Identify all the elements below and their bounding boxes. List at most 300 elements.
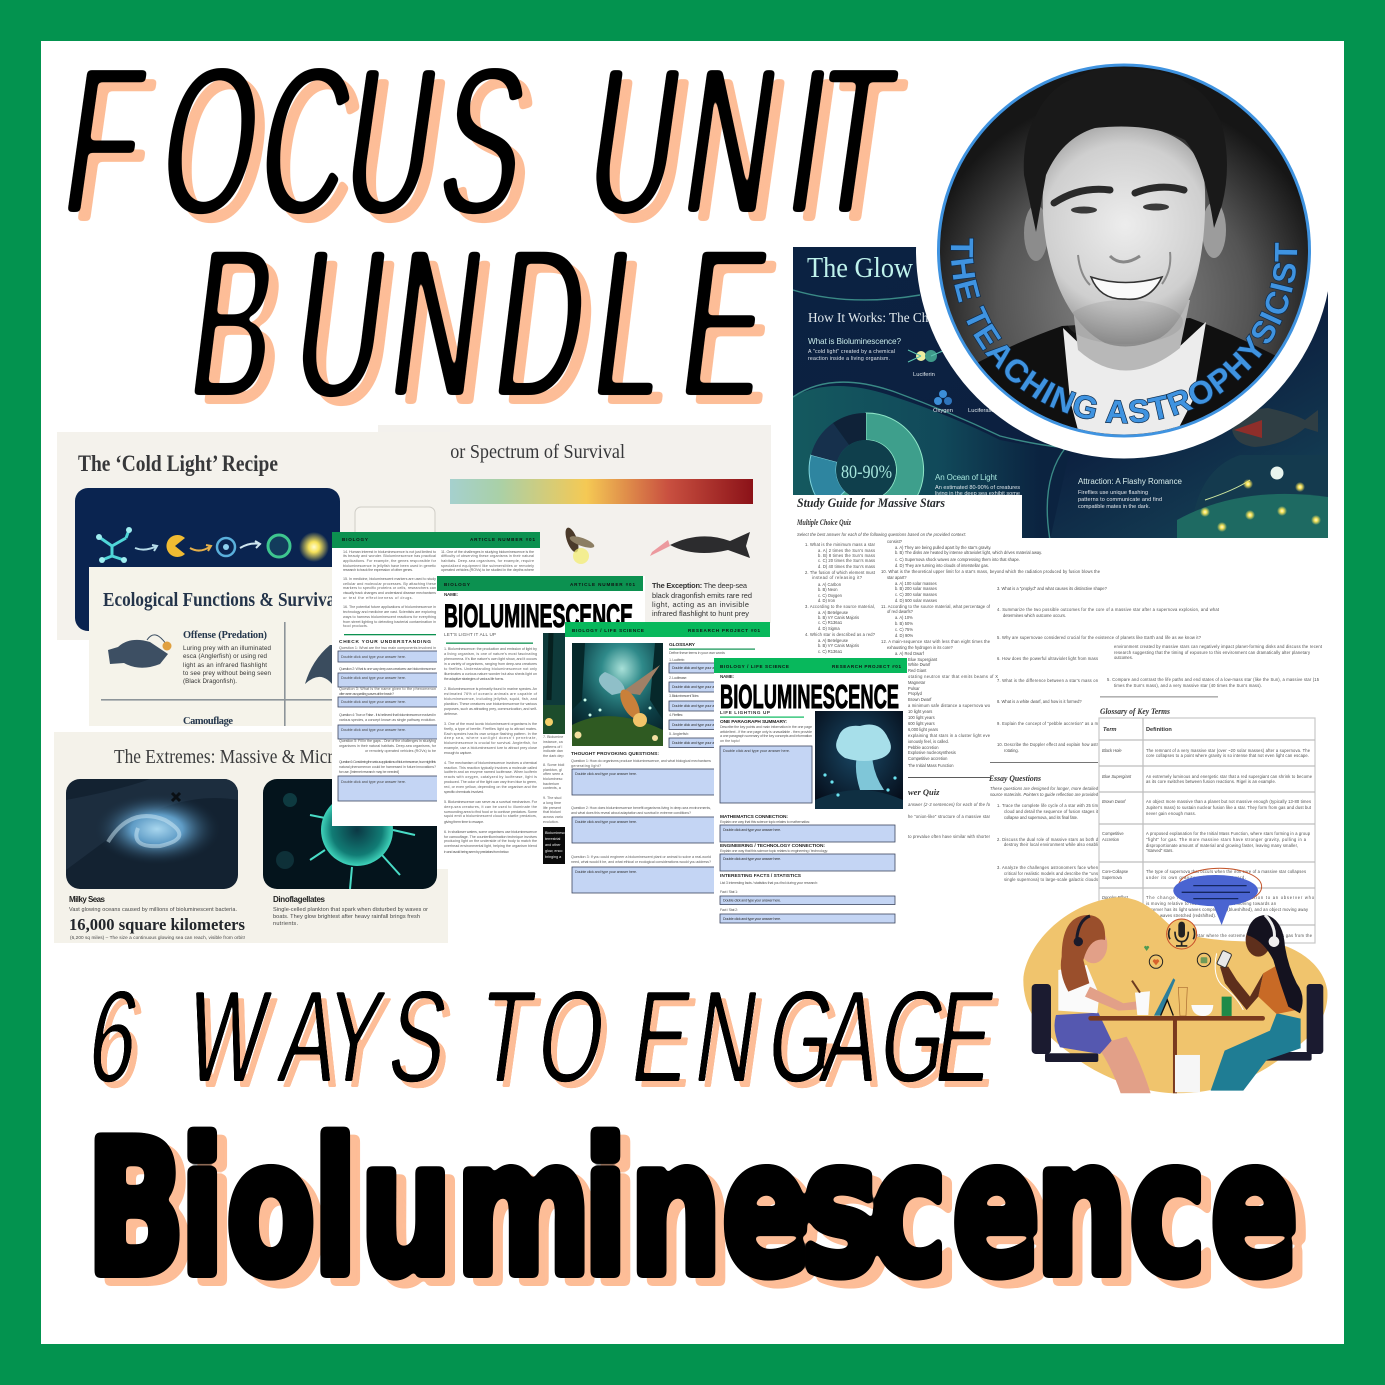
image: glowing firefly in forest — [572, 643, 663, 746]
document: bioluminescence article: contexts, a — [543, 786, 562, 790]
table: glossary: An object more massive than a planet but not massive enough (typically 13-80 times — [1146, 799, 1311, 804]
document: research project first page: a one paragraph summary of the key concepts and information — [720, 734, 812, 738]
document: study guide for massive stars: a. A) Carbon — [818, 582, 842, 587]
document: research project page: Double click and type your answer here. — [672, 723, 732, 727]
document: study guide for massive stars: 10 light years — [908, 709, 932, 714]
document: bioluminescence article: 4. The mechanism of bioluminescence involves a chemical — [444, 761, 537, 765]
panel: the glow infographic: Fireflies use unique flashing — [1078, 490, 1148, 496]
document: research project page — [565, 622, 770, 896]
document: article page two: 11. One of the challenges in studying bioluminescence is the — [441, 550, 534, 554]
document: bioluminescence article: in and avoid being seen by predators from below. — [444, 850, 509, 854]
document: bioluminescence article: 7. Biolumine — [543, 735, 563, 739]
table: glossary: A proposed explanation for the Initial Mass Function, where stars forming in a group — [1146, 831, 1311, 836]
document: bioluminescence article: indicate dan — [543, 749, 563, 753]
document: research project page: RESEARCH PROJECT #01 — [688, 628, 760, 633]
document: research project page: Question 3: If you could engineer a bioluminescent plant or animal to solve a real-world — [571, 855, 711, 859]
document: research project first page: Double click and type your answer here. — [723, 917, 781, 921]
document: study guide for massive stars: b. B) VY Canis Majoris — [818, 643, 859, 648]
document: research project first page: Explain one way that this science topic relates to engineering / technology: — [720, 849, 828, 853]
document: study guide for massive stars: exhausting the hydrogen in its core? — [887, 645, 953, 650]
document: article page two: applications. For example, the genes responsible for — [343, 559, 437, 563]
image: glowing mushroom — [815, 711, 903, 809]
document: study guide for massive stars: rotating. — [1004, 748, 1019, 753]
document: study guide for massive stars: 3. According to the source material, — [805, 604, 875, 609]
document: study guide for massive stars: d. D) 90% — [895, 633, 914, 638]
document: bioluminescence article: bioluminescence is crucial for survival. Anglerfish, for — [444, 741, 538, 745]
table: glossary: Definition — [1146, 727, 1172, 733]
document: article page two: 16. The potential future applications of bioluminescence in — [343, 605, 436, 609]
document: article page two: Double click and type your answer here. — [341, 655, 406, 659]
table: glossary: Brown Dwarf — [1102, 799, 1126, 804]
document: study guide for massive stars: d. D) Sigma — [818, 626, 840, 631]
document: study guide for massive stars: White Dwarf — [908, 662, 931, 667]
document: research project first page: Double click and type your answer here. — [723, 898, 781, 902]
table: glossary: under its own gravity, rebounding outward. — [1146, 875, 1246, 880]
document: study guide for massive stars: critical for realistic models and describe the "uns — [1004, 871, 1098, 876]
panel: ecological functions: Luring prey with an illuminated — [183, 645, 272, 652]
document: article page two: cellular and molecular processes. By attaching these — [343, 582, 436, 586]
document: study guide for massive stars: he "onion-like" structure of a massive star — [908, 814, 991, 819]
panel: the glow infographic: patterns to communicate and find — [1078, 497, 1162, 503]
document: study guide for massive stars: otating neutron star that emits beams of X — [908, 674, 998, 679]
document: article page two: food products. — [343, 624, 368, 628]
document: research project first page: Double click and type your answer here. — [723, 857, 781, 861]
document: article page two: or remotely operated vehicles (ROVs) to be — [365, 749, 436, 753]
panel: color spectrum of survival: light, acting as an invisible — [652, 600, 749, 609]
table: glossary: Jupiter's mass) to sustain nuclear fusion like a star. They form from gas and dust but — [1146, 805, 1312, 810]
panel: color spectrum of survival — [378, 425, 771, 623]
document: bioluminescence article: reaction. This reaction typically involves a molecule called — [444, 766, 537, 770]
document: research project first page: LIFE LIGHTING UP — [720, 710, 770, 715]
panel: the glow infographic: A "cold light" created by a chemical — [808, 349, 895, 355]
document: glossary of key terms: environment created by massive stars can negatively impact planet-forming disks and discuss the recent — [1114, 644, 1323, 649]
panel: the glow infographic: reaction inside a living organism. — [808, 356, 890, 362]
document: research project first page: ONE PARAGRAPH SUMMARY: — [720, 719, 787, 725]
document: study guide for massive stars: d. D) They are turning into clouds of interstellar gas. — [895, 563, 989, 568]
document: research project first page: BIOLUMINESCENCE — [720, 678, 899, 715]
document: bioluminescence article: reacts with oxygen, catalyzed by luciferase, light is — [444, 775, 537, 779]
document: study guide for massive stars: Competitive accretion — [908, 756, 948, 761]
document: research project first page: ENGINEERING / TECHNOLOGY CONNECTION: — [720, 843, 825, 849]
panel: the glow infographic: What is Bioluminescence? — [808, 337, 901, 346]
document: research project page: Double click and type your answer here. — [575, 772, 637, 776]
table: glossary: as its core switches between fusion reactions. Rigel is an example. — [1146, 779, 1276, 784]
document: study guide for massive stars: c. C) 300 solar masses — [895, 592, 937, 597]
document: study guide for massive stars: 2. Discuss the dual role of massive stars as both d — [997, 837, 1099, 842]
document: bioluminescence article: in a variety of organisms, ranging from deep-sea creatures — [444, 662, 537, 666]
document: bioluminescence article: producing light on the underside of the body to match the — [444, 839, 537, 843]
document: study guide for massive stars: source materials. Pointers to guide reflection are provided — [990, 792, 1099, 797]
panel: the glow infographic: Luciferin — [913, 372, 935, 378]
document: research project first page: Fact / Stat 1: — [720, 890, 738, 894]
table: glossary: has its waves stretched (redshifted). — [1146, 913, 1216, 918]
document: bioluminescence article: giving them time to escape. — [444, 820, 484, 824]
document: research project page: Define these terms in your own words — [669, 651, 725, 655]
panel: the glow infographic: compatible mates in the dark. — [1078, 504, 1150, 510]
panel: color spectrum of survival: black dragonfish emits rare red — [652, 591, 752, 600]
panel: cold light recipe: The ‘Cold Light’ Recipe — [78, 451, 278, 476]
document: research project page: Double click and type your answer here. — [672, 685, 732, 689]
document: article page two: markers to specific proteins or cells, researchers can — [343, 586, 436, 590]
document: bioluminescence article: 2. Bioluminescence is primarily found in marine species. An — [444, 687, 537, 691]
document: study guide for massive stars: 4. Summarize the two possible outcomes for the core of a massive star after a supernova explosion, and what — [997, 607, 1220, 612]
table: glossary: The remnant of a very massive star (over ~20 solar masses) after a supernova. The — [1146, 748, 1311, 753]
document: research project first page: INTERESTING FACTS / STATISTICS — [720, 873, 802, 879]
document: study guide for massive stars: 5. Why are supernovae considered crucial for the existence of planets like Earth and life as we know it? — [997, 635, 1202, 640]
document: study guide for massive stars: a. A) 10% — [895, 615, 913, 620]
document: bioluminescence article: defense. — [444, 712, 458, 716]
document: study guide for massive stars: 3. What is a "proplyd" and what causes its distinctive shape? — [997, 586, 1108, 591]
document: study guide for massive stars: 3. Analyze the challenges astronomers face when — [997, 865, 1099, 870]
document: study guide for massive stars: a. A) 100 solar masses — [895, 581, 937, 586]
panel: the glow infographic: Oxygen — [933, 408, 953, 414]
document: bioluminescence article: illuminates a curious nature wonder but also sheds light on — [444, 672, 537, 676]
title: focus unit: FOCUS UNIT — [52, 22, 908, 259]
table: glossary: Term — [1103, 727, 1116, 733]
document: article page two: operated vehicles (ROVs) to be studied in the depths where — [441, 568, 534, 572]
document: bioluminescence article: phenomena. It's like nature's own light show, and it occurs — [444, 657, 537, 661]
icon: oxygen — [934, 390, 952, 405]
panel: the extremes: Vast glowing oceans caused by millions of bioluminescent bacteria. — [69, 907, 237, 913]
document: bioluminescence article: bacterium — [543, 782, 559, 786]
document: research project first page: on the topic! — [720, 739, 740, 743]
illustration: two women listening to a podcast — [1023, 868, 1327, 1093]
icons: reactions — [1144, 946, 1211, 968]
document: research project first page: Double click and type your answer here. — [723, 828, 781, 832]
document: study guide for massive stars: explaining that stars in a cluster light eve — [908, 733, 991, 738]
document: study guide for massive stars: c. C) Oxygen — [818, 593, 843, 598]
document: bioluminescence article: specific chemicals involved. — [444, 790, 484, 794]
panel: ecological functions: esca (Anglerfish) or using red — [183, 653, 268, 660]
document: study guide for massive stars: 100 light years — [908, 715, 935, 720]
document: article page two: 14. Human interest in bioluminescence is not just limited to — [343, 550, 436, 554]
document: study guide for massive stars: b. B) 50% — [895, 621, 913, 626]
panel: ecological functions: Ecological Functions & Survival — [103, 589, 340, 611]
document: bioluminescence article: a living organism, is one of nature's most fascinating — [444, 652, 537, 656]
document: study guide for massive stars: Study Guide for Massive Stars — [797, 495, 945, 510]
document: article page two: Question 6: Considering the various applications of bioluminescence, how might this — [339, 760, 436, 764]
image: milky seas — [66, 779, 238, 889]
document: bioluminescence article: and other — [545, 843, 561, 847]
panel: the extremes — [54, 732, 448, 943]
document: article page two: its beauty and wonder. Bioluminescence has practical — [343, 554, 436, 558]
document: bioluminescence article: instance, ca — [543, 740, 564, 744]
document: study guide for massive stars: 1. Trace the complete life cycle of a star with 25 tim — [997, 803, 1099, 808]
document: research project page: 2. Luciferase: — [669, 676, 687, 680]
document: research project first page: article/text - if the one page only is unavailable - then provide — [720, 730, 812, 734]
document: bioluminescence article: 6. In shallower waters, some organisms use bioluminescence — [444, 830, 537, 834]
image: fireflies in night meadow — [1177, 455, 1328, 538]
panel: the extremes: The Extremes: Massive & Microscopic — [114, 746, 386, 768]
document: bioluminescence article: a long time — [543, 801, 561, 805]
document: study guide for massive stars: 4. Which star is described as a red? — [805, 632, 876, 637]
document: bioluminescence article: LET'S LIGHT IT ALL UP — [444, 632, 496, 637]
document: bioluminescence article: red, or even yellow, depending on the organism and the — [444, 785, 537, 789]
document: study guide for massive stars: c. C) Supernova shock waves are compressing them into that shape. — [895, 557, 1020, 562]
subtitle: 6 ways to engage: 6 WAYS TO ENGAGE — [81, 964, 1002, 1111]
document: bioluminescence article: firefly, a type of beetle. Fireflies light up to attract mates. — [444, 727, 537, 731]
table: glossary: Core-Collapse — [1102, 869, 1129, 874]
panel: ecological functions: to see prey without being seen — [183, 670, 272, 677]
document: study guide for massive stars: 7. What is the difference between a star's mass on — [997, 678, 1099, 683]
document: study guide for massive stars: The Initial Mass Function — [908, 763, 954, 768]
document: bioluminescence article: the adaptive strategies of various life forms. — [444, 677, 504, 681]
table: glossary: "starved" stars. — [1146, 848, 1173, 853]
document: bioluminescence article: to fireflies. Understanding bioluminescence not only — [444, 667, 537, 671]
document: research project page: Question 2: How does bioluminescence benefit organisms living in deep-sea environments, — [571, 806, 711, 810]
document: study guide for massive stars: 9. Explain the concept of "pebble accretion" as a m — [997, 721, 1099, 726]
title: bioluminescence: Bioluminescence — [96, 1108, 1309, 1325]
table: glossary: Accretion — [1102, 837, 1120, 842]
icon: microphone — [1167, 919, 1197, 949]
document: bioluminescence article: 9. The stud — [543, 796, 561, 800]
document: study guide for massive stars: collapse and supernova, and its final fate. — [1004, 815, 1078, 820]
document: study guide for massive stars: c. C) 20 times the Sun's mass — [818, 558, 875, 563]
document: study guide for massive stars: 1. What is the minimum mass a star — [805, 542, 876, 547]
document: study guide for massive stars: b. B) VY Canis Majoris — [818, 615, 859, 620]
document: study guide for massive stars: Blue Supergiant — [908, 657, 938, 662]
document: study guide for massive stars: of red dwarfs? — [887, 609, 914, 614]
document: bioluminescence article: bioluminesc — [543, 777, 563, 781]
document: study guide for massive stars: a. A) Betelgeuse — [818, 638, 849, 643]
table: glossary: Black Hole — [1102, 748, 1122, 753]
document: research project first page: RESEARCH PROJECT #01 — [832, 664, 901, 669]
document: research project first page: NAME: — [720, 674, 734, 679]
document: article page two: Double click and type your answer here. — [341, 728, 406, 732]
document: bioluminescence article: BIOLOGY — [444, 582, 470, 587]
document: bioluminescence article: deep-sea creatures, it can be used to illuminate the — [444, 805, 537, 809]
document: bioluminescence article: bringing a — [545, 855, 562, 859]
document: study guide for massive stars: b. B) The disks are heated by intense ultraviolet light, which drives material away. — [895, 550, 1042, 555]
document: study guide for massive stars: a. A) Betelgeuse — [818, 610, 849, 615]
document: study guide for massive stars: Select the best answer for each of the following questions based on the provided context: — [797, 532, 966, 537]
document: study guide for massive stars: ionously feel, is called. — [908, 739, 949, 744]
title: bioluminescence: Bioluminescence — [86, 1100, 1299, 1317]
document: article page two: often seen as sparkling waves at the beach? — [339, 692, 394, 696]
woman on the left — [1055, 915, 1151, 1093]
document: study guide for massive stars: 600 light years — [908, 721, 935, 726]
document: research project first page: BIOLOGY / LIFE SCIENCE — [720, 664, 789, 669]
portrait photo — [930, 60, 1320, 445]
document: study guide for massive stars: 10. Describe the Doppler effect and explain how astr — [997, 742, 1099, 747]
title: bundle: BUNDLE — [179, 203, 780, 442]
document: study guide for massive stars: wer Quiz — [908, 787, 940, 797]
document: article page two: visually track changes and understand disease mechanisms — [343, 591, 436, 595]
panel: the extremes: 16,000 square kilometers — [69, 915, 245, 934]
title: bundle: BUNDLE — [189, 212, 790, 451]
document: article page two: BIOLOGY — [342, 537, 368, 542]
panel: the extremes: Dinoflagellates — [273, 895, 326, 904]
document: bioluminescence article: plankton, gl — [543, 768, 562, 772]
panel: the glow infographic: living in the deep sea exhibit some — [935, 491, 1020, 497]
document: research project first page: List 3 interesting facts / statistics that you find during your research: — [720, 881, 818, 885]
document: research project first page — [714, 658, 907, 930]
document: bioluminescence article: enough to capture. — [444, 751, 472, 755]
document: study guide for massive stars: c. C) 75% — [895, 627, 913, 632]
table: glossary: An extremely luminous and energetic star that a red supergiant can shrink to become — [1146, 774, 1313, 779]
document: study guide for massive stars: a minimum safe distance a supernova wo — [908, 703, 991, 708]
document: study guide for massive stars: Red Giant — [908, 668, 927, 673]
document: article page two: Double click and type your answer here. — [341, 780, 406, 784]
table: glossary: Blue Supergiant — [1102, 774, 1132, 779]
document: article page two: Question 3: What is the name given to the phenomenon — [339, 687, 436, 691]
table: glossary: The type of supernova that occurs when the iron core of a massive star collapses — [1146, 869, 1306, 874]
document: bioluminescence article: produced. The color of the light can vary from blue to green, — [444, 780, 537, 784]
document: study guide for massive stars: 6,000 light years — [908, 727, 938, 732]
document: bioluminescence article: luciferin and an enzyme named luciferase. When luciferin — [444, 770, 537, 774]
document: article page two: various species, a concept known as single pathway evolution. — [339, 718, 436, 722]
document: article page two: Question 1: What are the two main components involved in — [339, 646, 436, 650]
document: study guide for massive stars: 10. What is the theoretical upper limit for a star's mass, beyond which the radiation produced by fusion blows the — [881, 569, 1101, 574]
table: glossary — [1099, 718, 1315, 943]
document: article page two: for use. [Internet research may be needed] — [339, 770, 399, 774]
document: article page two: 15. In medicine, bioluminescent markers are used to study — [343, 577, 436, 581]
document: article page two: ways to harness bioluminescent reactions for everything — [343, 615, 436, 619]
document: article page two: habitats. Deep-sea organisms, for example, require — [441, 559, 534, 563]
table: glossary: Competitive — [1102, 831, 1124, 836]
document: research project page: generating light? — [571, 764, 601, 768]
document: bioluminescence article: 5. Bioluminescence can serve as a survival mechanism. For — [444, 800, 538, 804]
panel: color spectrum of survival: The Exception: The deep-sea — [652, 581, 748, 590]
document: glossary of key terms: Glossary of Key Terms — [1100, 707, 1170, 716]
document: bioluminescence article: plankton. These creatures use bioluminescence for various — [444, 702, 537, 706]
document: research project page: THOUGHT PROVOKING QUESTIONS: — [571, 751, 659, 757]
document: article page two: research to track the expression of other genes. — [343, 568, 413, 572]
document: bioluminescence article: 3. One of the most iconic bioluminescent organisms is the — [444, 722, 537, 726]
document: research project page: Double click and type your answer here. — [575, 870, 637, 874]
document: study guide for massive stars: a. A) They are being pulled apart by the star's gravity. — [895, 545, 992, 550]
document: study guide for massive stars: 11. According to the source material, what percentage of — [881, 604, 991, 609]
document: bioluminescence article: ARTICLE NUMBER #01 — [570, 582, 635, 587]
document: research project first page: Explain one way that this science topic relates to mathematics: — [720, 820, 810, 824]
table and items — [1088, 978, 1265, 1093]
table: glossary: The stage of a massive star where the extreme stellar wind strips gas from the — [1146, 933, 1313, 938]
panel: ecological functions: Offense (Predation) — [183, 630, 267, 641]
document: bioluminescence article: for camouflage. The counterillumination technique involves — [444, 835, 537, 839]
document: article page two: organisms in their natural habitats. Deep-sea organisms, for — [339, 744, 437, 748]
panel: cold light recipe — [57, 432, 450, 640]
chart: 80-90 percent donut: 80-90% — [841, 462, 892, 483]
document: study guide for massive stars: to prevalue often have similar with shorter — [908, 834, 991, 839]
document: bioluminescence article: glow, enco — [545, 849, 562, 853]
document: bioluminescence article: that bioluni — [543, 810, 561, 814]
document: article page two: specialized equipment like submersibles or remotely — [441, 564, 534, 568]
document: bioluminescence article: evolution. — [543, 820, 559, 824]
document: article page two: bioluminescence in jellyfish have been used in genetic — [343, 564, 436, 568]
panel: ecological functions: Camouflage — [183, 716, 233, 727]
document: research project page: BIOLOGY / LIFE SCIENCE — [572, 628, 644, 633]
table: glossary: disproportionate amount of material and growing faster, leaving many smaller, — [1146, 843, 1298, 848]
document: study guide for massive stars: Pebble accretion — [908, 745, 939, 750]
document: bioluminescence article: purposes, such as attracting prey, communication, and self- — [444, 707, 538, 711]
document: research project first page: Fact / Stat 2: — [720, 908, 738, 912]
document: research project page: 5. Anglerfish: — [669, 732, 689, 736]
speech bubble — [1173, 868, 1262, 925]
document: bioluminescence article — [437, 576, 645, 869]
document: bioluminescence article: example, use a bioluminescent lure to attract prey close — [444, 746, 537, 750]
document: study guide for massive stars: instead of releasing it? — [812, 575, 863, 580]
document: study guide for massive stars: Pulsar — [908, 686, 920, 691]
document: article page two: CHECK YOUR UNDERSTANDING — [339, 639, 431, 645]
document: research project page: Question 1: How do organisms produce bioluminescence, and what biological mechanisms — [571, 759, 711, 763]
document: study guide for massive stars: 6. How does the powerful ultraviolet light from mass — [997, 656, 1098, 661]
document: research project page: Double click and type your answer here. — [575, 820, 637, 824]
document: article page two: natural phenomenon could be harnessed in future innovations? — [339, 765, 436, 769]
document: study guide for massive stars — [793, 495, 1220, 900]
document: research project page: GLOSSARY — [669, 642, 696, 648]
document: research project page: Double click and type your answer here. — [672, 741, 732, 745]
document: study guide for massive stars: These questions are designed for longer, more detailed — [990, 786, 1099, 791]
chairs — [1032, 984, 1323, 1062]
document: glossary of key terms: outcomes. — [1114, 655, 1133, 660]
panel: color spectrum of survival: infrared flashlight to hunt prey — [652, 609, 749, 618]
document: study guide for massive stars: c. C) R136a1 — [818, 620, 843, 625]
panel: ecological functions: (Black Dragonfish). — [183, 678, 237, 685]
document: glossary of key terms: research suggesting that the timing of exposure to this environment can dramatically alter planetary — [1114, 650, 1311, 655]
document: study guide for massive stars: single supernova) to large-scale galactic clouds — [1004, 877, 1098, 882]
title: focus unit: FOCUS UNIT — [62, 31, 918, 268]
panel: the glow infographic: How It Works: The Chemistry — [808, 311, 968, 326]
document: study guide for massive stars: destroy their local environment while also enabli — [1004, 842, 1098, 847]
document: bioluminescence article: NAME: — [444, 592, 458, 597]
document: study guide for massive stars: Multiple Choice Quiz — [796, 518, 852, 527]
panel: cold light recipe: >90% — [365, 529, 427, 558]
document: study guide for massive stars: d. D) 500 solar masses — [895, 598, 937, 603]
document: bioluminescence article: patterns of l — [543, 745, 562, 749]
image: forest strip — [543, 633, 565, 734]
subtitle: 6 ways to engage: 6 WAYS TO ENGAGE — [87, 970, 1008, 1117]
document: study guide for massive stars: star apart? — [887, 575, 907, 580]
document: bioluminescence article: overhead environmental light, helping the organism blend — [444, 844, 537, 848]
panel: the extremes: Milky Seas — [69, 895, 106, 904]
document: research project page: need, what would it be, and what ethical or ecological considerations would you address? — [571, 860, 711, 864]
panel: the glow infographic: An Ocean of Light — [935, 473, 998, 482]
document: bioluminescence article: across vario — [543, 815, 563, 819]
document: article page two: ARTICLE NUMBER #01 — [470, 537, 535, 542]
panel: the glow infographic: Luciferase — [968, 408, 995, 414]
document: study guide for massive stars: consist? — [887, 539, 903, 544]
document: bioluminescence article: often seen a — [543, 772, 564, 776]
document: study guide for massive stars: a. A) Red Dwarf — [895, 651, 925, 656]
document: article page two: difficulty of observing these organisms in their natural — [441, 554, 534, 558]
panel: the glow infographic: Attraction: A Flashy Romance — [1078, 477, 1183, 486]
panel: the extremes: nutrients. — [273, 921, 298, 927]
document: study guide for massive stars: c. C) R136a1 — [818, 649, 843, 654]
panel: ecological functions: light as an infrared flashlight — [183, 662, 267, 669]
curved name text: THE TEACHING ASTROPHYSICIST — [950, 238, 1298, 424]
document: article page two: Question 2: What is one way deep-sea creatures use bioluminescence — [339, 667, 436, 671]
document: article page two: Question 5: Fill in the gaps - One of the challenges in studying — [339, 739, 436, 743]
panel: color spectrum of survival: Color Spectrum of Survival — [424, 441, 625, 463]
document: article page two — [332, 532, 540, 826]
document: study guide for massive stars: Essay Questions — [988, 773, 1042, 783]
document: bioluminescence article: estimated 76% of oceanic animals are capable of — [444, 692, 538, 696]
panel: the extremes: (6,200 sq miles) – The size a continuous glowing sea can reach, visible from orbit! — [70, 935, 245, 940]
image: dinoflagellate — [263, 779, 437, 889]
document: bioluminescence article: terrestrial — [545, 837, 561, 841]
woman on the right — [1211, 915, 1303, 1091]
document: study guide for massive stars: b. B) 8 times the Sun's mass — [818, 553, 875, 558]
document: bioluminescence article: BIOLUMINESCENCE — [444, 598, 633, 634]
document: research project first page: Describe the key points and main information in the one page — [720, 725, 812, 729]
document: bioluminescence article: bioluminescence, including jellyfish, squid, fish, and — [444, 697, 537, 701]
document: study guide for massive stars: 2. The fusion of which element must — [805, 570, 876, 575]
table: glossary: The change in frequency of a wave in relation to an observer who — [1146, 895, 1315, 900]
panel: the glow infographic: An estimated 80-90% of creatures — [935, 485, 1020, 491]
document: article page two: Question 4: True or False - It is believed that bioluminescence evolved in — [339, 713, 436, 717]
document: bioluminescence article: Bioluminesc — [545, 831, 565, 835]
document: bioluminescence article: squid emit a bioluminescent cloud to startle predators, — [444, 814, 537, 818]
